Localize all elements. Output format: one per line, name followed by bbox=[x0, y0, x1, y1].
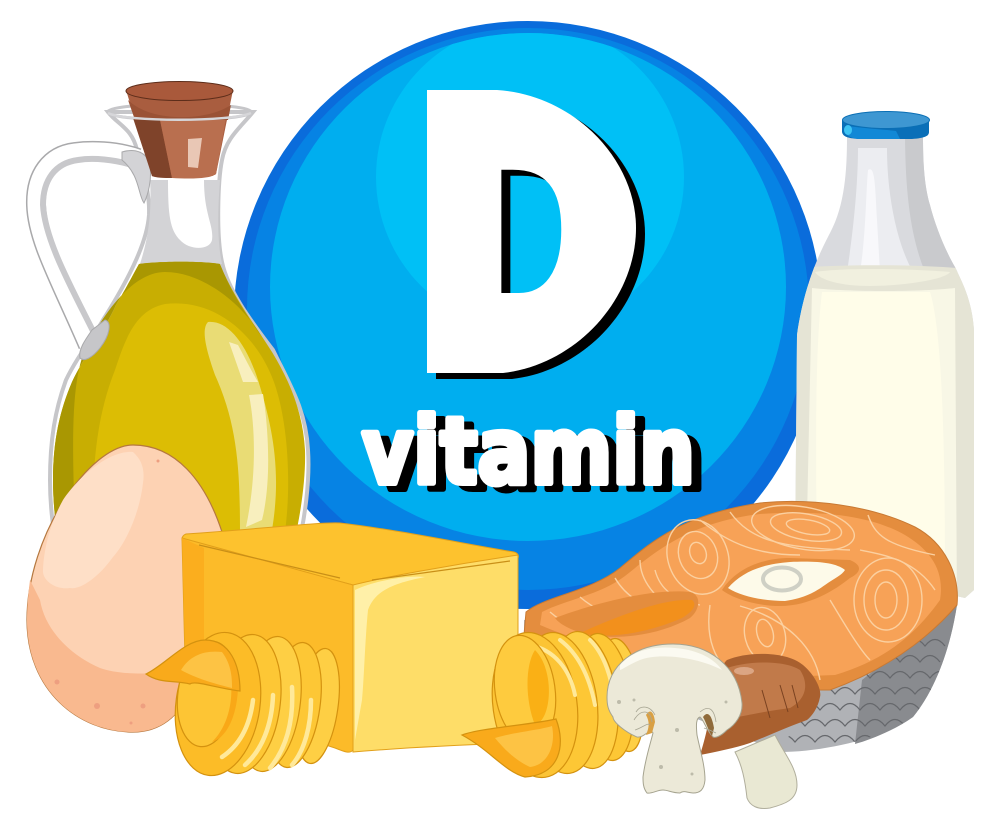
olive oil jug bbox=[36, 82, 308, 550]
fish bone cavity bbox=[722, 558, 859, 606]
salmon steak bbox=[524, 498, 957, 752]
jug handle bbox=[36, 151, 151, 360]
mushroom: back bbox=[700, 654, 820, 809]
jug rim back bbox=[108, 104, 252, 120]
glass body bbox=[50, 112, 308, 550]
egg bbox=[27, 445, 222, 732]
butter curl: left bbox=[146, 627, 346, 781]
oil highlight bbox=[205, 322, 276, 545]
heading word: vitamin: vitamin bbox=[372, 404, 705, 511]
butter top face bbox=[182, 523, 518, 585]
heading letter: D: D bbox=[425, 32, 648, 443]
fish skin bbox=[524, 605, 957, 752]
butter curl: right bbox=[462, 627, 650, 783]
flesh grain lines bbox=[550, 498, 935, 680]
mushroom: front bbox=[607, 644, 742, 793]
heading letter: D bbox=[427, 90, 645, 379]
fish flesh bbox=[524, 501, 957, 690]
butter right face bbox=[353, 555, 518, 752]
heading word: vitamin: vitamin bbox=[362, 398, 695, 505]
cork bbox=[126, 82, 233, 179]
belly cut bbox=[555, 591, 698, 637]
blue vitamin circle bbox=[234, 21, 822, 609]
butter left face bbox=[182, 538, 353, 752]
bottle cap bbox=[842, 112, 930, 139]
jug rim front bbox=[108, 113, 251, 120]
oil bbox=[53, 262, 305, 550]
heading letter: D: D bbox=[416, 26, 639, 437]
glass and milk bbox=[790, 130, 980, 610]
milk bottle bbox=[790, 112, 980, 610]
butter block bbox=[182, 523, 518, 752]
